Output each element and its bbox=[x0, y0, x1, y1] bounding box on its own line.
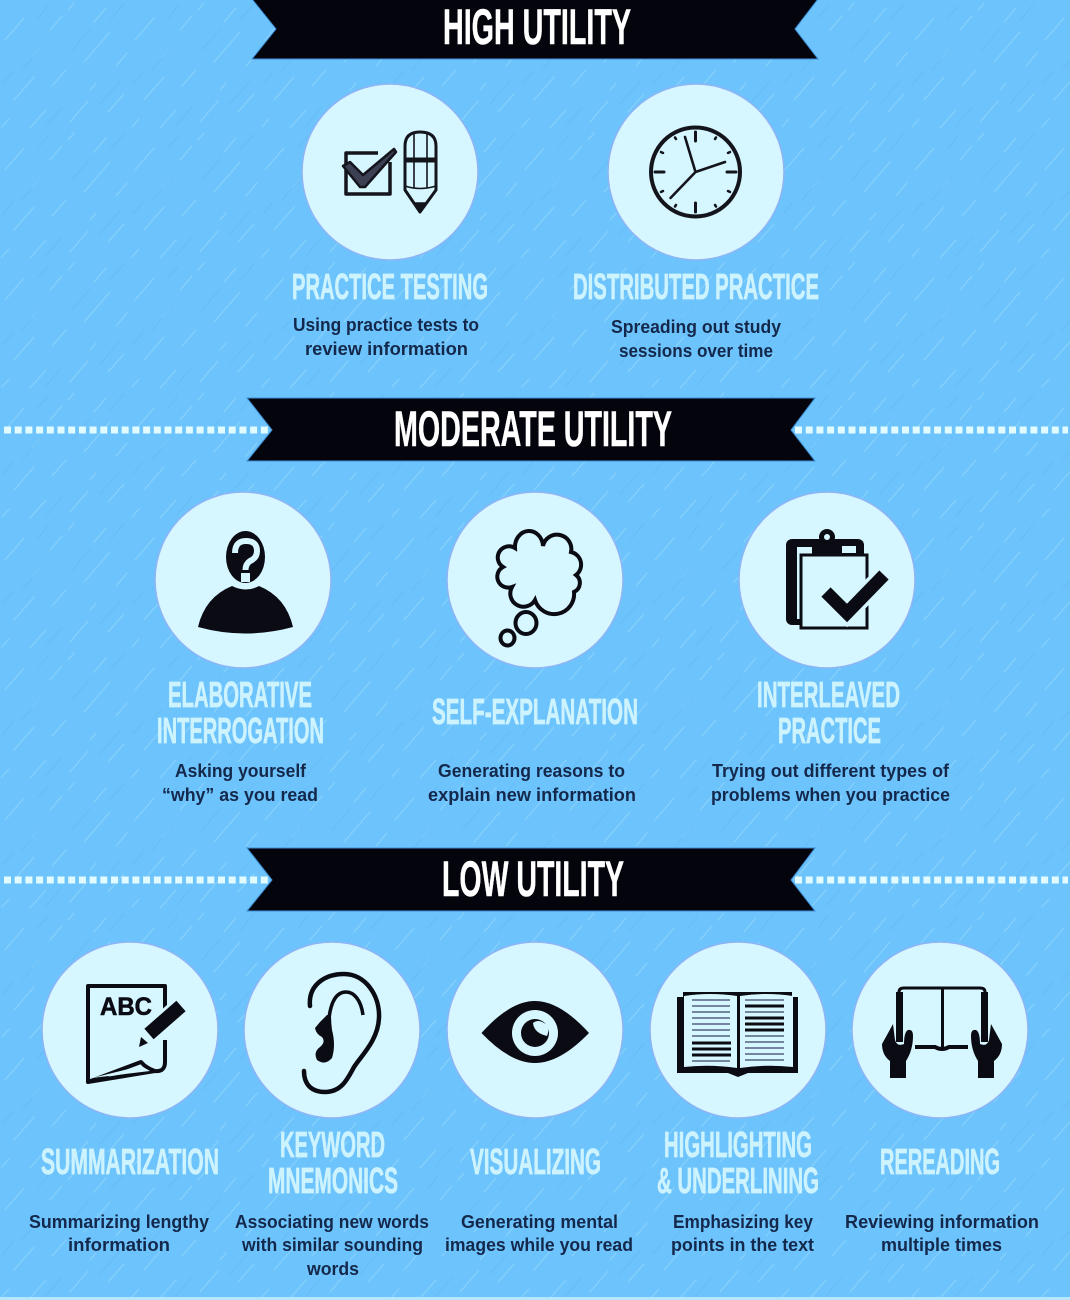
description bbox=[671, 1211, 814, 1255]
item: keyword mnemonics bbox=[235, 942, 429, 1279]
icon: eye bbox=[482, 1001, 589, 1063]
item: distributed practice bbox=[573, 84, 819, 361]
dotted divider left and right bbox=[4, 876, 1068, 884]
item: rereading bbox=[845, 942, 1039, 1255]
description bbox=[845, 1211, 1039, 1255]
description: sessions over time bbox=[619, 340, 773, 361]
description: points in the text bbox=[671, 1234, 814, 1255]
heading: INTERROGATION bbox=[157, 710, 324, 751]
item: summarization bbox=[29, 942, 219, 1255]
panel: moderate utility bbox=[4, 398, 1068, 805]
description: information bbox=[68, 1234, 170, 1255]
icon: person with question mark bbox=[198, 531, 293, 634]
description: Summarizing lengthy bbox=[29, 1211, 210, 1232]
icon: clock bbox=[651, 128, 740, 216]
heading: PRACTICE TESTING bbox=[292, 266, 488, 307]
description: Reviewing information bbox=[845, 1211, 1039, 1232]
description: Using practice tests to bbox=[293, 314, 479, 335]
description: Emphasizing key bbox=[673, 1211, 814, 1232]
heading bbox=[157, 674, 324, 751]
item: practice testing bbox=[292, 84, 488, 359]
icon: checkbox and pencil bbox=[343, 132, 436, 212]
description: Asking yourself bbox=[175, 760, 307, 781]
description bbox=[428, 760, 636, 805]
icon: paper with ABC and pencil bbox=[88, 986, 181, 1082]
banner: low utility bbox=[247, 848, 815, 911]
description: problems when you practice bbox=[711, 784, 950, 805]
heading bbox=[757, 674, 900, 751]
description bbox=[293, 314, 479, 359]
description bbox=[445, 1211, 633, 1255]
icon: hands holding a book bbox=[882, 988, 1002, 1078]
description: with similar sounding bbox=[241, 1234, 423, 1255]
description: Generating reasons to bbox=[438, 760, 625, 781]
description: Generating mental bbox=[461, 1211, 618, 1232]
description: review information bbox=[305, 338, 468, 359]
description: images while you read bbox=[445, 1234, 633, 1255]
heading: INTERLEAVED bbox=[757, 674, 900, 715]
icon: paper with ABC and pencil: ABC bbox=[100, 993, 152, 1021]
banner: high utility: HIGH UTILITY bbox=[443, 0, 631, 55]
description bbox=[29, 1211, 210, 1255]
item: elaborative interrogation bbox=[155, 492, 331, 805]
heading: KEYWORD bbox=[280, 1124, 385, 1165]
description: explain new information bbox=[428, 784, 636, 805]
icon: ear bbox=[304, 974, 379, 1092]
panel: high utility bbox=[252, 0, 819, 361]
heading: & UNDERLINING bbox=[657, 1160, 819, 1201]
item: interleaved practice bbox=[711, 492, 950, 805]
heading: SELF-EXPLANATION bbox=[432, 691, 638, 732]
banner: high utility bbox=[252, 0, 818, 59]
heading bbox=[268, 1124, 398, 1201]
banner: low utility: LOW UTILITY bbox=[442, 851, 624, 907]
banner: moderate utility bbox=[247, 398, 815, 461]
item: self-explanation bbox=[428, 492, 638, 805]
description: words bbox=[306, 1258, 359, 1279]
description: Trying out different types of bbox=[712, 760, 950, 781]
description bbox=[611, 316, 782, 361]
item: visualizing bbox=[445, 942, 633, 1255]
icon: clipboard with check bbox=[786, 529, 884, 628]
dotted divider left and right bbox=[4, 426, 1068, 434]
heading: SUMMARIZATION bbox=[41, 1141, 219, 1182]
heading: DISTRIBUTED PRACTICE bbox=[573, 266, 819, 307]
description: multiple times bbox=[881, 1234, 1002, 1255]
panel: low utility bbox=[4, 848, 1068, 1279]
heading: ELABORATIVE bbox=[168, 674, 312, 715]
description: “why” as you read bbox=[162, 784, 318, 805]
description: Associating new words bbox=[235, 1211, 429, 1232]
description bbox=[711, 760, 950, 805]
icon: open book with highlighted lines bbox=[677, 992, 798, 1077]
description bbox=[162, 760, 318, 805]
heading bbox=[657, 1124, 819, 1201]
heading: MNEMONICS bbox=[268, 1160, 398, 1201]
banner: moderate utility: MODERATE UTILITY bbox=[394, 401, 672, 457]
heading: PRACTICE bbox=[778, 710, 881, 751]
description: Spreading out study bbox=[611, 316, 782, 337]
icon: thought cloud bbox=[497, 531, 581, 646]
heading: HIGHLIGHTING bbox=[664, 1124, 812, 1165]
description bbox=[235, 1211, 429, 1279]
item: highlighting and underlining bbox=[650, 942, 826, 1255]
heading: VISUALIZING bbox=[470, 1141, 601, 1182]
